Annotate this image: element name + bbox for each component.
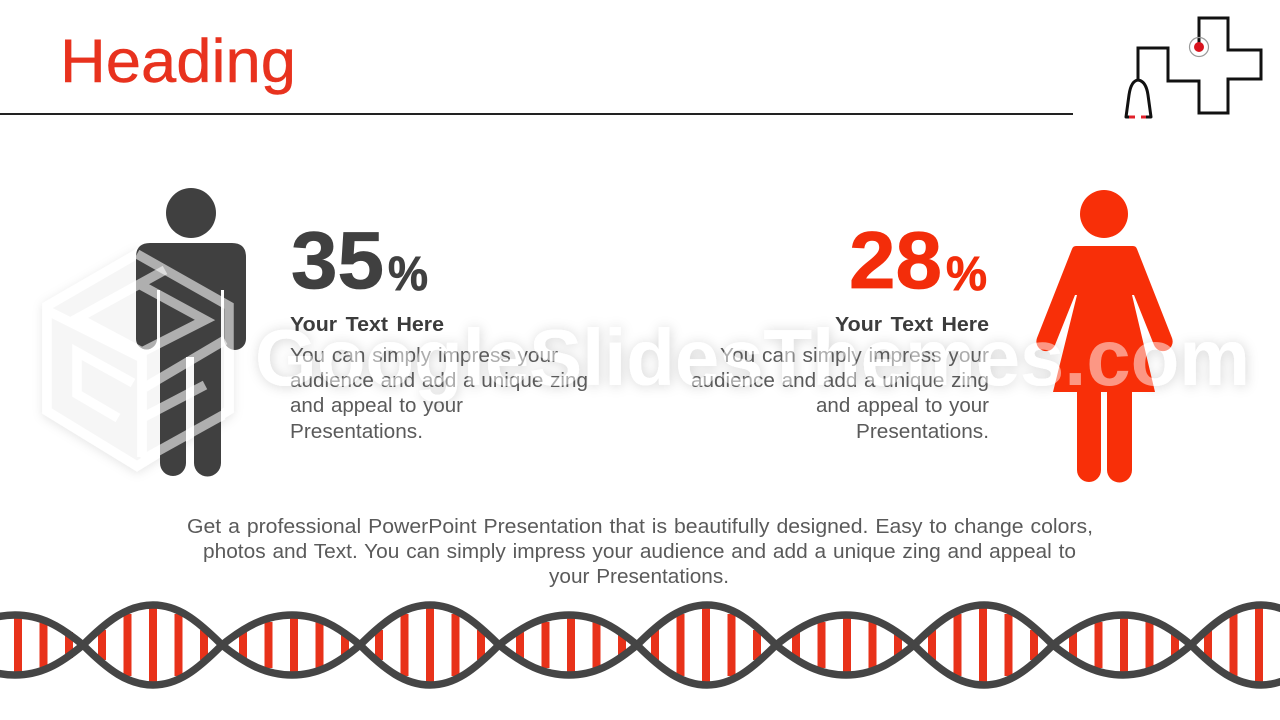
left text block — [290, 313, 588, 443]
DNA helix — [0, 605, 1280, 685]
stat: 28 percent: 28 — [849, 216, 942, 306]
right text block — [691, 313, 989, 443]
right text block: and appeal to your — [816, 394, 989, 417]
watermark: cube logo base — [47, 254, 229, 466]
watermark: site name overlay: GoogleSlidesThemes.com — [255, 313, 1250, 402]
summary paragraph — [187, 515, 1093, 588]
stat: 35 percent: % — [388, 248, 428, 301]
summary paragraph: your Presentations. — [549, 565, 729, 588]
right text block: Your Text Here — [835, 313, 989, 336]
icon: stethoscope and medical cross — [1126, 18, 1261, 117]
left text block: You can simply impress your — [290, 344, 558, 367]
summary paragraph: photos and Text. You can simply impress your audience and add a unique zing and appeal to — [203, 540, 1076, 563]
left text block: and appeal to your — [290, 394, 463, 417]
left text block: Your Text Here — [290, 313, 444, 336]
stat: 35 percent: 35 — [291, 216, 384, 306]
icon: male figure — [136, 188, 246, 476]
right text block: Presentations. — [856, 420, 989, 443]
right text block: audience and add a unique zing — [691, 369, 989, 392]
icon: female figure — [1036, 190, 1173, 482]
right text block: You can simply impress your — [720, 344, 989, 367]
stat: 35 percent — [291, 216, 428, 306]
left text block: Presentations. — [290, 420, 423, 443]
stat: 28 percent: % — [946, 248, 987, 301]
left text block: audience and add a unique zing — [290, 369, 588, 392]
watermark: cube logo overlay — [78, 254, 229, 460]
watermark: site name base: GoogleSlidesThemes.com — [255, 313, 1250, 402]
stat: 28 percent — [849, 216, 987, 306]
title: Heading — [60, 27, 296, 95]
header rule — [0, 113, 1073, 115]
summary paragraph: Get a professional PowerPoint Presentation that is beautifully designed. Easy to change colors, — [187, 515, 1093, 538]
